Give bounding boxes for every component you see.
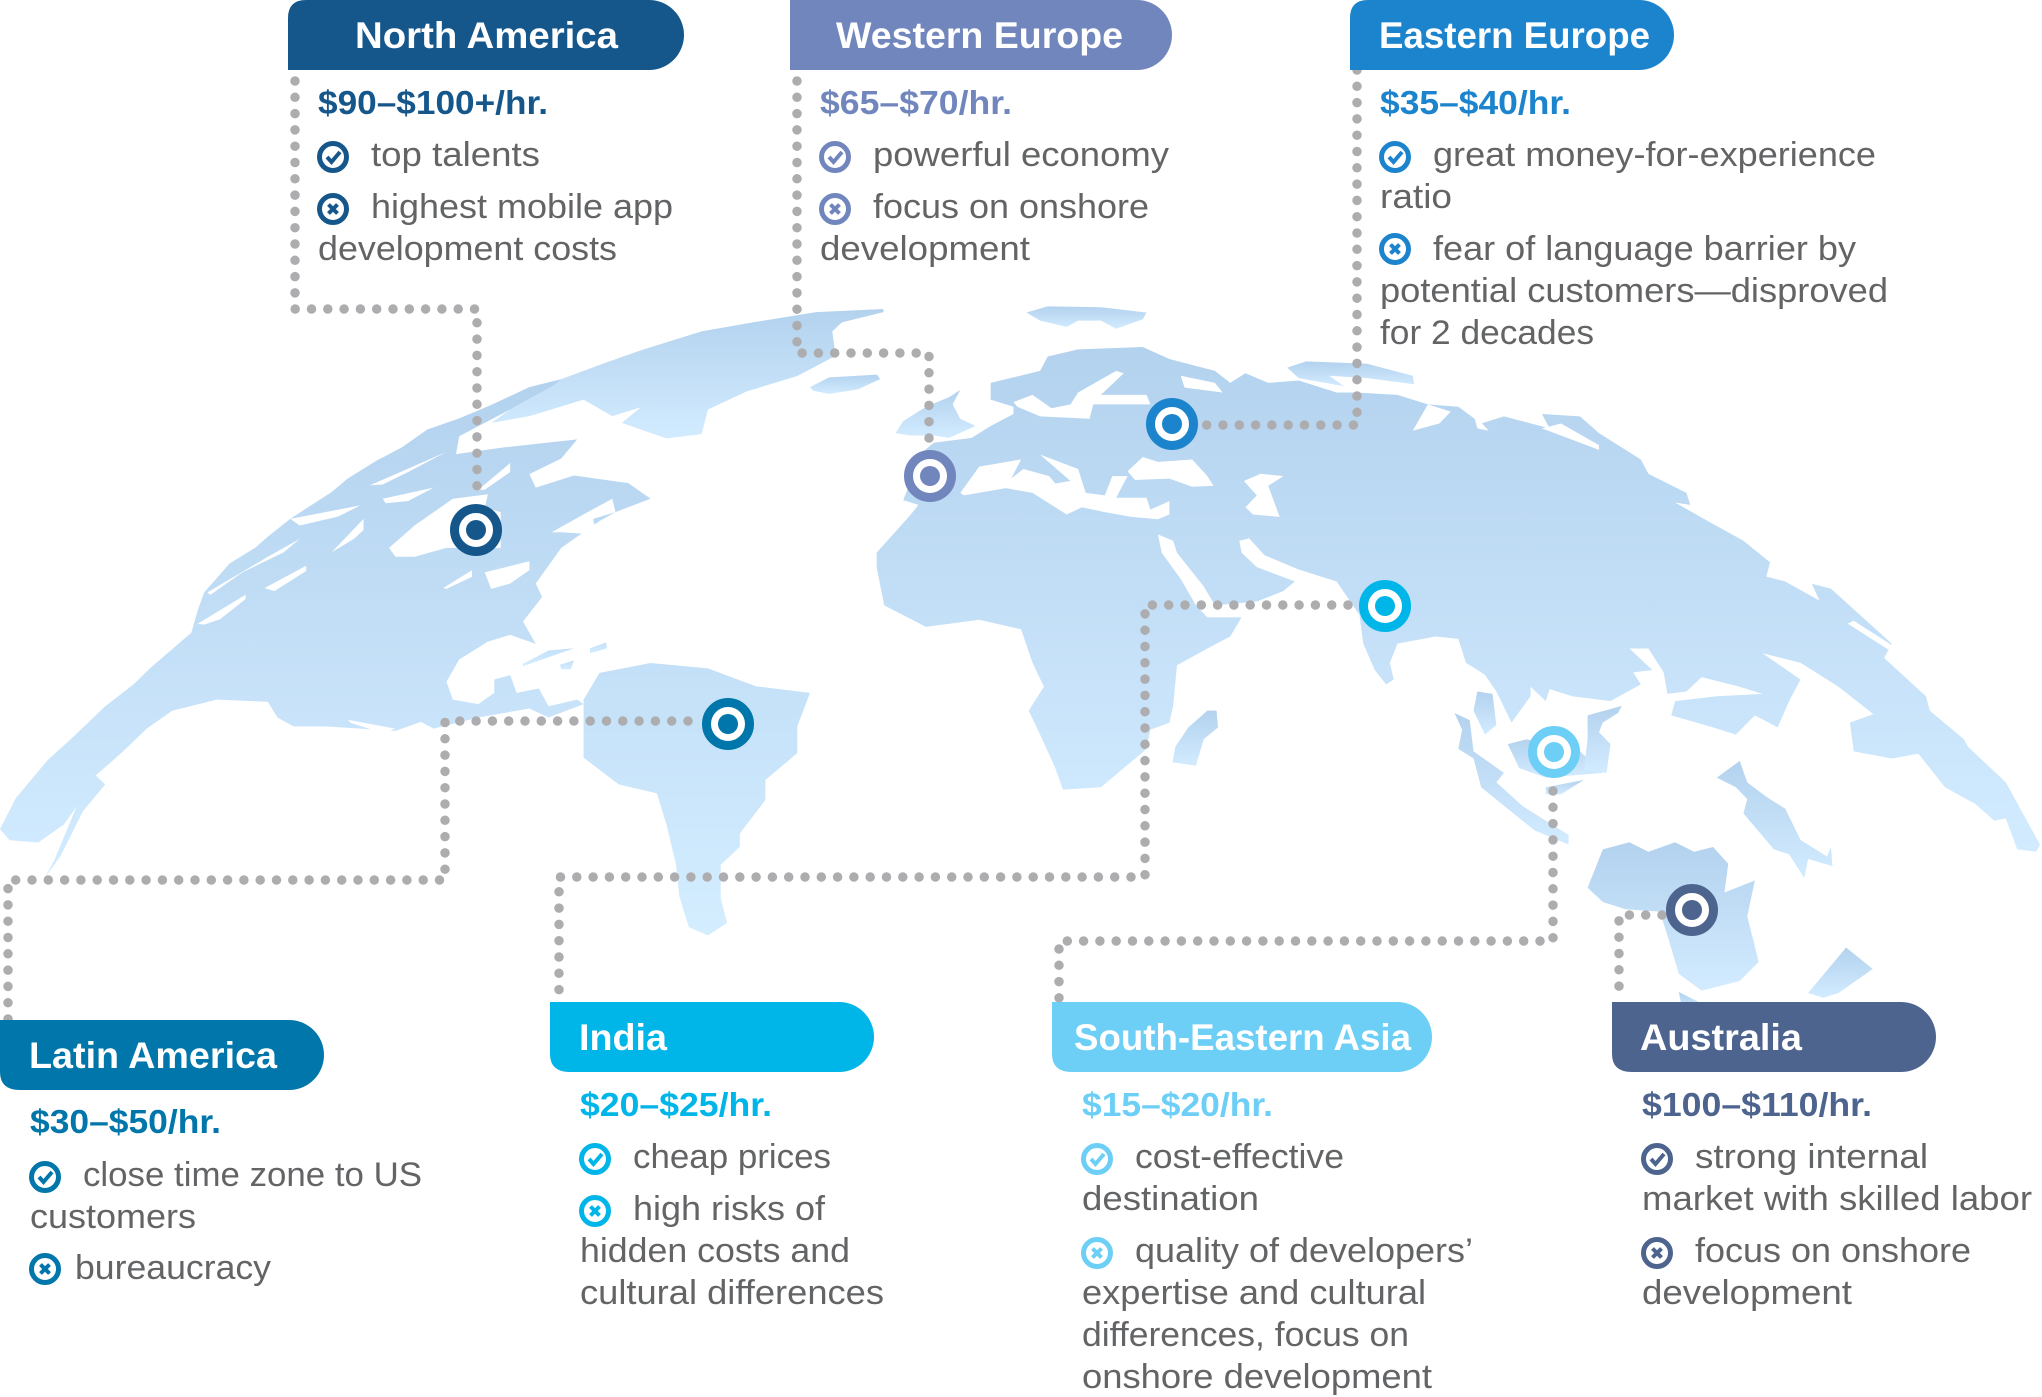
header: Latin America: Latin America: [29, 1035, 277, 1076]
con: developer quality: onshore development: [1082, 1358, 1433, 1396]
panel: North America: [288, 0, 684, 268]
price: Australia: $100–$110/hr.: [1642, 1087, 1872, 1124]
connector: India: [559, 605, 1348, 1002]
con: onshore focus: development: [820, 230, 1031, 268]
pro: time zone: [30, 1156, 422, 1236]
header: Western Europe: Western Europe: [836, 15, 1123, 56]
landmass: southern islands: [1808, 948, 1873, 998]
connector: Western Europe: [797, 81, 929, 440]
map pin: Eastern Europe: [1150, 402, 1194, 446]
con: hidden costs: [580, 1190, 884, 1312]
header: India: India: [579, 1017, 667, 1058]
pro: cheap prices: cheap prices: [633, 1138, 831, 1176]
header: North America: [288, 0, 684, 70]
con: language barrier: potential customers—disproved: [1380, 272, 1888, 310]
header: North America: North America: [355, 15, 618, 56]
landmass: British Isles: [896, 390, 975, 438]
con: hidden costs: hidden costs and: [580, 1232, 850, 1270]
con: onshore focus: focus on onshore: [873, 188, 1149, 226]
price: Latin America: $30–$50/hr.: [30, 1104, 221, 1141]
header: Latin America: [0, 1020, 324, 1090]
panel: Latin America: [0, 1020, 422, 1287]
connector: South-Eastern Asia: [1059, 791, 1553, 1002]
landmass: Eurasia and Africa: [877, 347, 2040, 852]
price: North America: $90–$100+/hr.: [318, 85, 548, 122]
header: Australia: Australia: [1640, 1017, 1802, 1058]
map pin: India: [1364, 584, 1406, 628]
world map: [0, 306, 2040, 1012]
panel: Eastern Europe: [1350, 0, 1888, 352]
pro: money-for-experience: ratio: [1380, 178, 1452, 216]
con: highest costs: development costs: [318, 230, 617, 268]
con: onshore focus: [820, 188, 1149, 268]
pro: cost-effective: destination: [1082, 1180, 1259, 1218]
header: Eastern Europe: [1350, 0, 1674, 70]
connector: Eastern Europe: [1204, 70, 1357, 425]
con: language barrier: [1380, 230, 1888, 352]
pro: internal market: [1642, 1138, 2032, 1218]
con: onshore focus: focus on onshore: [1695, 1232, 1971, 1270]
map pin: South-Eastern Asia: [1532, 730, 1576, 774]
landmass: Tasmania: [1679, 992, 1700, 1012]
panel: South-Eastern Asia: [1052, 1002, 1473, 1396]
pro: money-for-experience: great money-for-experience: [1433, 136, 1876, 174]
header: Eastern Europe: Eastern Europe: [1379, 15, 1650, 56]
con: developer quality: [1082, 1232, 1473, 1396]
map pin: Western Europe: [908, 454, 952, 498]
connector: Australia: [1619, 915, 1662, 1002]
con: bureaucracy: bureaucracy: [75, 1249, 271, 1287]
connector: North America: [295, 81, 477, 492]
con: onshore focus: development: [1642, 1274, 1853, 1312]
con: hidden costs: cultural differences: [580, 1274, 884, 1312]
con: developer quality: quality of developers’: [1135, 1232, 1473, 1270]
landmass: North America: [0, 379, 651, 878]
header: India: [550, 1002, 874, 1072]
landmass: Novaya Zemlya: [1287, 361, 1414, 386]
pro: time zone: customers: [30, 1198, 196, 1236]
price: India: $20–$25/hr.: [580, 1087, 772, 1124]
pro: cost-effective: [1082, 1138, 1344, 1218]
landmass: eastern islands: [1717, 761, 1832, 878]
pro: cost-effective: cost-effective: [1135, 1138, 1344, 1176]
pro: powerful economy: powerful economy: [873, 136, 1169, 174]
pro: time zone: close time zone to US: [83, 1156, 422, 1194]
con: developer quality: differences, focus on: [1082, 1316, 1409, 1354]
header: South-Eastern Asia: South-Eastern Asia: [1074, 1017, 1411, 1058]
water: Baltic, Mediterranean, Black and Caspian seas: [960, 371, 1893, 649]
price: Eastern Europe: $35–$40/hr.: [1380, 85, 1571, 122]
connector lines: [8, 70, 1662, 1020]
panel: Australia: [1612, 1002, 2032, 1312]
price: South-Eastern Asia: $15–$20/hr.: [1082, 1087, 1273, 1124]
pro: internal market: market with skilled labor: [1642, 1180, 2032, 1218]
header: Western Europe: [790, 0, 1172, 70]
landmass: Madagascar: [1172, 711, 1218, 766]
water: Hudson Bay and Canadian lakes: [198, 452, 615, 733]
connector: Latin America: [8, 721, 688, 1020]
map pin: Australia: [1670, 888, 1714, 932]
map: Americas: [0, 309, 883, 935]
landmass: Australia: [1588, 842, 1759, 991]
header: South-Eastern Asia: [1052, 1002, 1432, 1072]
landmass: Svalbard: [1026, 306, 1147, 329]
price: Western Europe: $65–$70/hr.: [820, 85, 1012, 122]
map pin: Latin America: [706, 702, 750, 746]
map pin: North America: [454, 508, 498, 552]
landmass: Greenland: [491, 309, 883, 438]
pro: top talents: top talents: [371, 136, 540, 174]
con: developer quality: expertise and cultural: [1082, 1274, 1426, 1312]
islands: Caribbean: [523, 642, 607, 669]
panel: Western Europe: [790, 0, 1172, 268]
con: highest costs: highest mobile app: [371, 188, 673, 226]
con: highest costs: [318, 188, 673, 268]
con: language barrier: for 2 decades: [1380, 314, 1594, 352]
landmass: South America: [584, 663, 810, 935]
map: Eurasia, Africa and Oceania: [877, 306, 2040, 1012]
con: language barrier: fear of language barrier by: [1433, 230, 1856, 268]
landmass: Iceland: [810, 375, 880, 394]
islands: South-East Asia: [1455, 692, 1622, 845]
header: Australia: [1612, 1002, 1936, 1072]
panel: India: [550, 1002, 884, 1312]
pro: money-for-experience: [1380, 136, 1876, 216]
con: onshore focus: [1642, 1232, 1971, 1312]
con: hidden costs: high risks of: [633, 1190, 826, 1228]
pro: internal market: strong internal: [1695, 1138, 1928, 1176]
